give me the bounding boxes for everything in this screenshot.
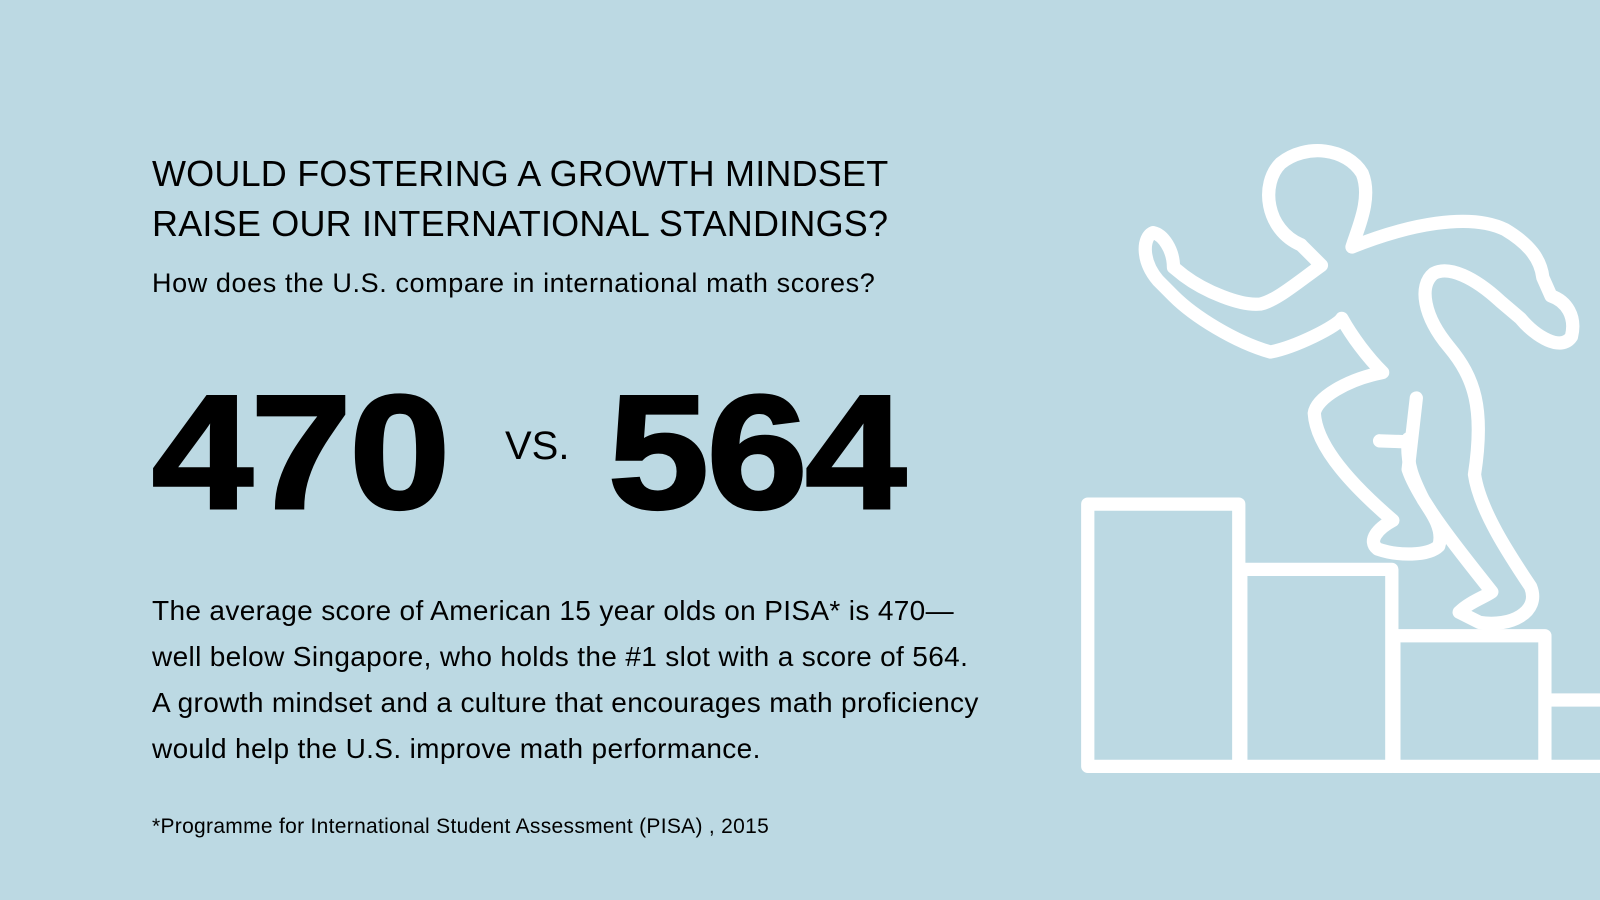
footnote: *Programme for International Student Assessment (PISA) , 2015 (152, 815, 769, 838)
body paragraph: The average score of American 15 year olds on PISA* is 470— (152, 595, 954, 626)
body paragraph (152, 595, 979, 764)
title: WOULD FOSTERING A GROWTH MINDSET (152, 153, 888, 194)
subtitle: How does the U.S. compare in international math scores? (152, 268, 875, 298)
title: RAISE OUR INTERNATIONAL STANDINGS? (152, 203, 888, 244)
body paragraph: A growth mindset and a culture that encourages math proficiency (152, 687, 979, 718)
score: 470: 470 (152, 362, 448, 543)
vs label: VS. (505, 424, 569, 468)
steps (1088, 504, 1600, 766)
person outline (1145, 151, 1573, 623)
body paragraph: well below Singapore, who holds the #1 slot with a score of 564. (152, 641, 968, 672)
body paragraph: would help the U.S. improve math performance. (152, 733, 761, 764)
title (152, 153, 888, 244)
score: 564: 564 (608, 362, 904, 543)
